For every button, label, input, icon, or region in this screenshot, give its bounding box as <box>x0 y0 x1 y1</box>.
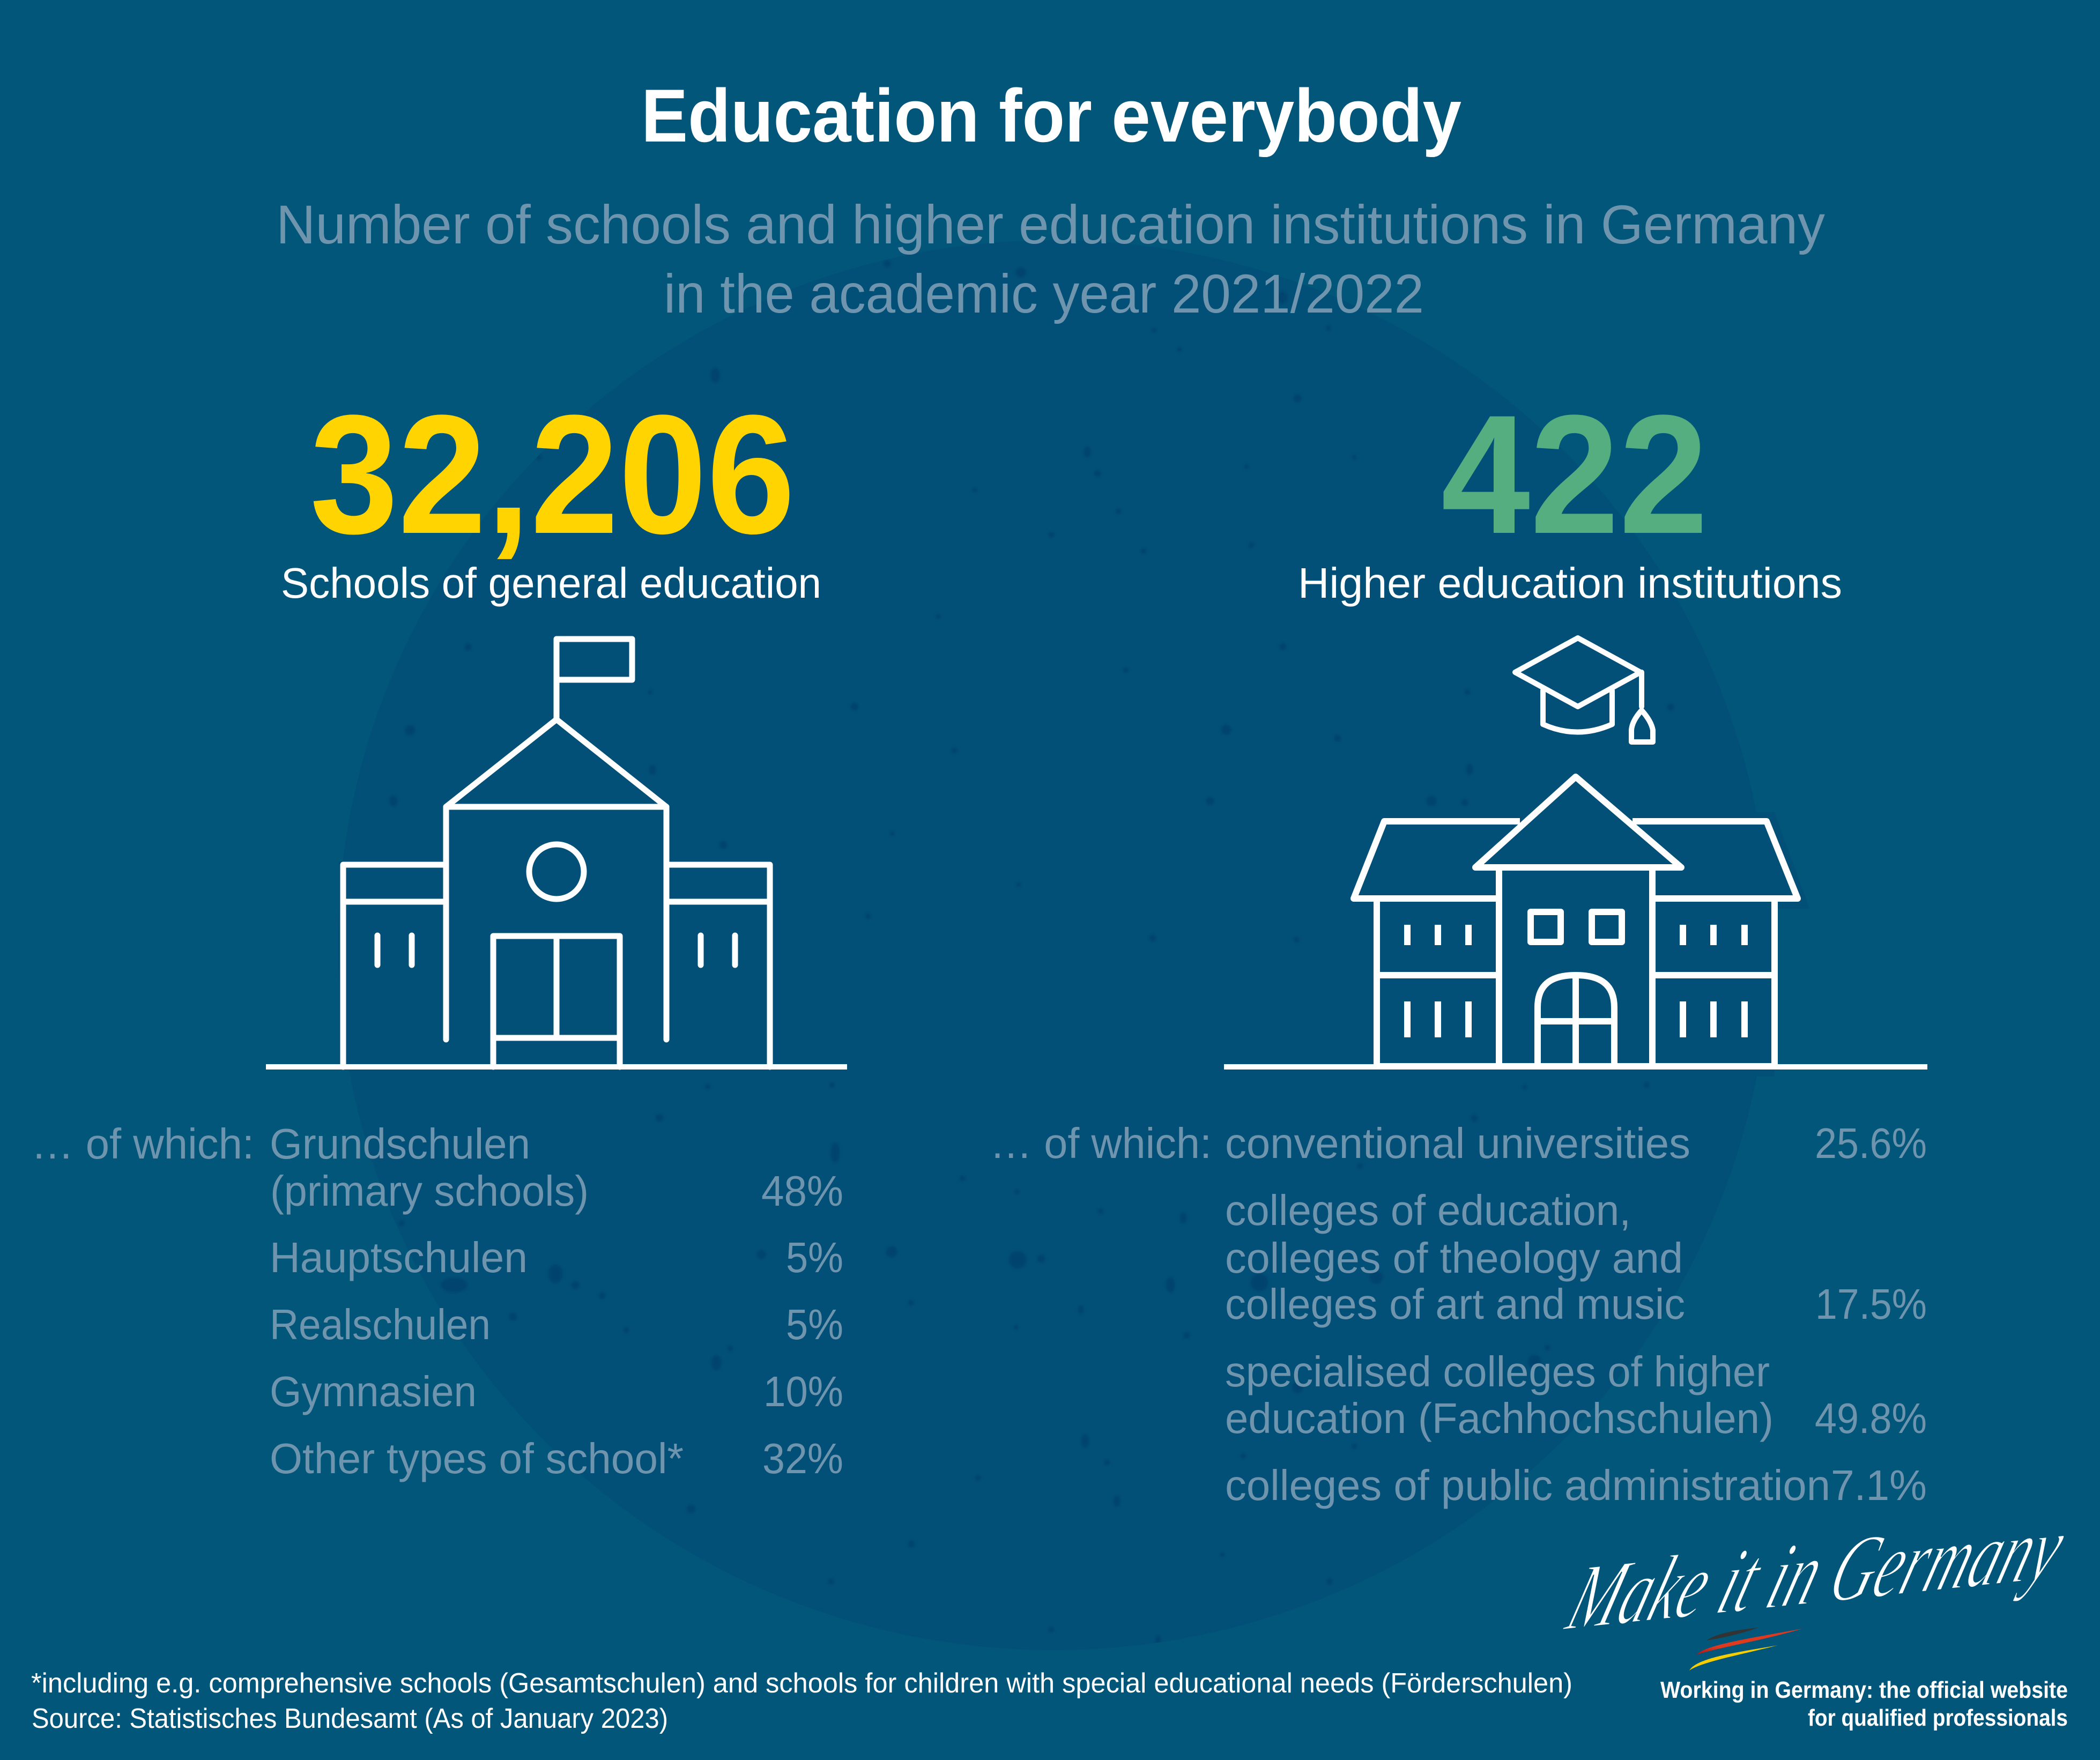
icon: school building <box>266 639 847 1067</box>
row: specialised colleges: specialised colleges of higher <box>1225 1348 1770 1395</box>
row: conventional universities: conventional universities <box>1225 1119 1690 1167</box>
row: conventional universities <box>1225 1119 1927 1167</box>
subtitle <box>276 194 1825 324</box>
breakdown list: schools <box>31 1120 843 1482</box>
row: colleges of education: 17.5% <box>1815 1280 1927 1328</box>
row: public administration: 7.1% <box>1831 1461 1927 1509</box>
row: Gymnasien: Gymnasien <box>270 1368 477 1415</box>
icon: graduation cap <box>1515 638 1653 742</box>
number: 422: 422 <box>1441 380 1708 569</box>
row: specialised colleges: education (Fachhochschulen) <box>1225 1394 1774 1442</box>
panel: schools of general education <box>31 380 847 1482</box>
icon: university building <box>1224 764 1927 1076</box>
subtitle: in the academic year 2021/2022 <box>664 263 1424 324</box>
panel: higher education institutions <box>990 380 1927 1509</box>
heading: schools: Schools of general education <box>281 559 821 607</box>
row: Realschulen: 5% <box>786 1301 843 1348</box>
row: specialised colleges <box>1225 1348 1927 1442</box>
row: colleges of education <box>1225 1186 1927 1328</box>
title: Education for everybody <box>641 73 1461 158</box>
breakdown list: higher education: … of which: <box>990 1119 1212 1167</box>
subtitle: Number of schools and higher education institutions in Germany <box>276 194 1825 255</box>
logo: Make it in Germany <box>1555 1494 2079 1731</box>
row: Gymnasien: 10% <box>763 1368 843 1415</box>
row: Hauptschulen <box>270 1234 843 1281</box>
row: Hauptschulen: 5% <box>786 1234 843 1281</box>
number: 32,206: 32,206 <box>310 380 795 569</box>
row: Realschulen <box>270 1301 843 1348</box>
row: other types: Other types of school* <box>270 1435 684 1482</box>
row: Gymnasien <box>270 1368 843 1415</box>
flag strokes <box>1689 1628 1802 1670</box>
background circle with speckles <box>388 259 1676 1643</box>
row: other types: 32% <box>762 1435 843 1482</box>
row: colleges of education: colleges of art and music <box>1225 1280 1685 1328</box>
row: specialised colleges: 49.8% <box>1815 1394 1927 1442</box>
tagline: for qualified professionals <box>1808 1705 2068 1731</box>
breakdown list: higher education <box>990 1119 1927 1509</box>
footnote and source: Source: Statistisches Bundesamt (As of January 2023) <box>32 1703 668 1734</box>
row: Realschulen: Realschulen <box>270 1301 491 1348</box>
row: colleges of education: colleges of education, <box>1225 1186 1631 1234</box>
tagline <box>1660 1677 2068 1731</box>
row: Grundschulen <box>270 1120 843 1215</box>
breakdown list: schools: … of which: <box>31 1120 254 1168</box>
footnote and source <box>31 1668 1572 1734</box>
row: Grundschulen: (primary schools) <box>270 1167 589 1215</box>
row: Hauptschulen: Hauptschulen <box>270 1234 528 1281</box>
row: Grundschulen: 48% <box>761 1167 843 1215</box>
row: conventional universities: 25.6% <box>1815 1119 1927 1167</box>
footnote and source: *including e.g. comprehensive schools (Gesamtschulen) and schools for children with special educational needs (Förderschulen) <box>31 1668 1572 1699</box>
row: Grundschulen: Grundschulen <box>270 1120 530 1168</box>
heading: higher education: Higher education institutions <box>1298 559 1842 607</box>
row: public administration: colleges of public administration <box>1225 1461 1830 1509</box>
row: colleges of education: colleges of theology and <box>1225 1234 1683 1282</box>
